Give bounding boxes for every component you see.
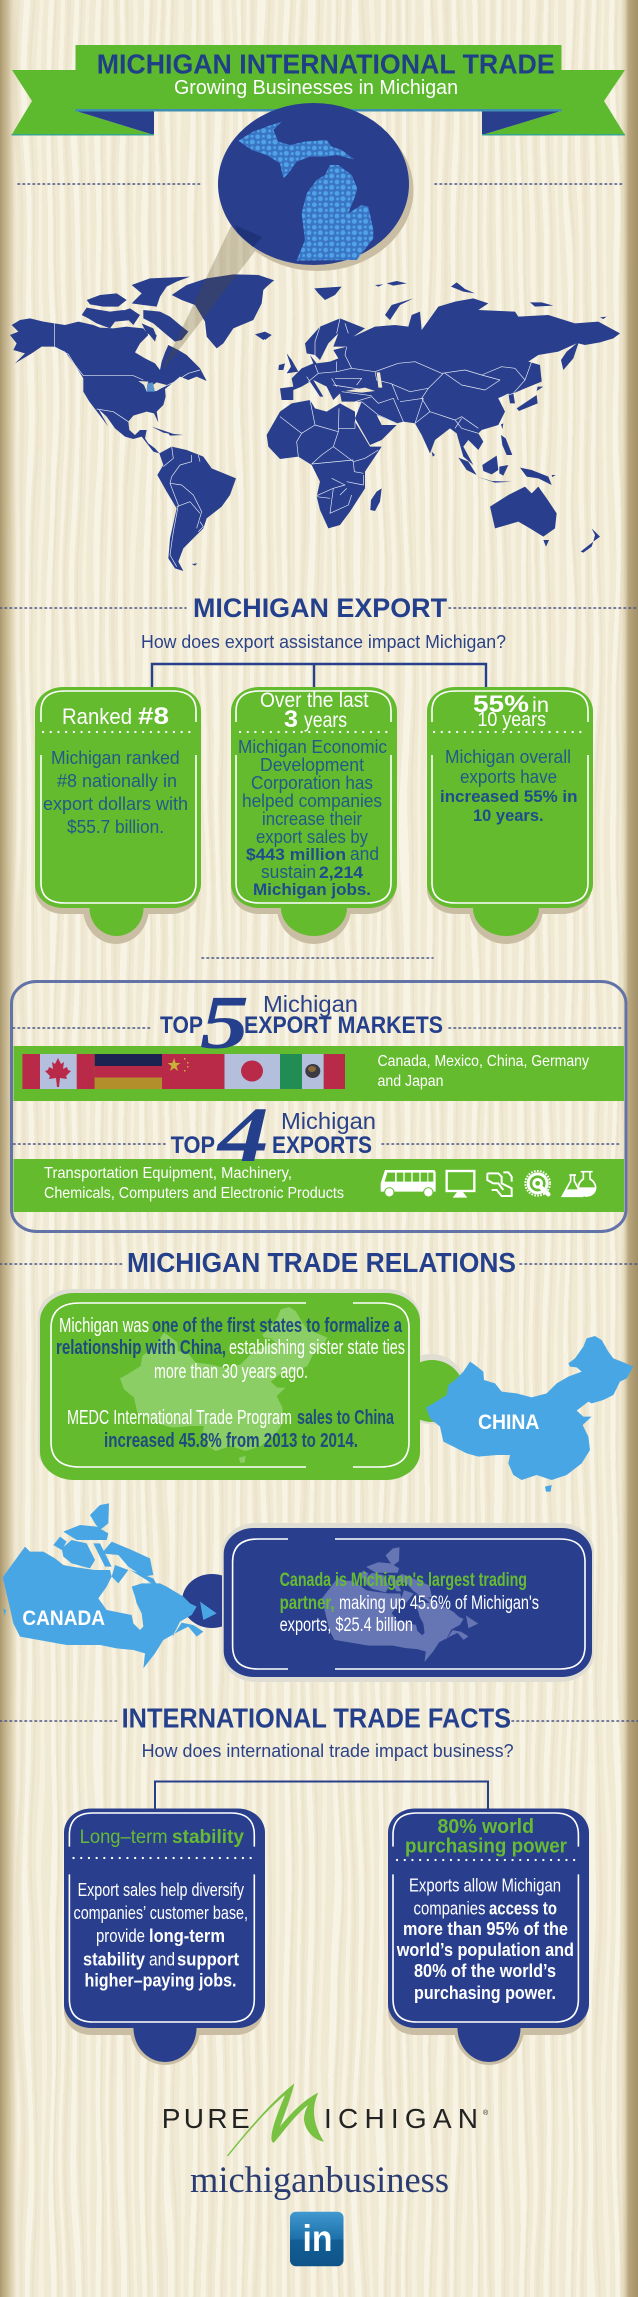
panel: Canada callout xyxy=(182,1523,594,1682)
heading: top 4 exports xyxy=(171,1091,376,1178)
card body: 80% of the world’s xyxy=(414,1961,556,1981)
heading: top 4 exports: EXPORTS xyxy=(272,1132,372,1159)
card body: increased 55% in xyxy=(440,787,578,806)
card heading: 80% world xyxy=(438,1816,534,1838)
panel: top exports box xyxy=(12,981,626,1232)
heading: top 4 exports: 4 xyxy=(215,1091,269,1178)
card body xyxy=(74,1880,248,1990)
card body: #8 nationally in xyxy=(57,771,177,791)
card body xyxy=(238,737,387,899)
card body: Corporation has xyxy=(251,773,373,793)
card body: $55.7 billion. xyxy=(67,817,164,837)
heading: top 4 exports: TOP xyxy=(171,1132,215,1159)
logo: Pure Michigan: PURE xyxy=(162,2103,250,2134)
card body: access to xyxy=(489,1898,557,1918)
card body: increase their xyxy=(262,809,362,829)
card heading xyxy=(62,703,169,730)
wordmark: michiganbusiness: michiganbusiness xyxy=(190,2160,449,2201)
flags: Canada, Germany, China, Japan, Mexico xyxy=(22,1054,345,1089)
text: top exports: Chemicals, Computers and Electronic Products xyxy=(44,1185,344,1202)
world map xyxy=(10,274,620,571)
heading: International Trade Facts: INTERNATIONAL TRADE FACTS xyxy=(122,1702,511,1734)
card heading: 3 xyxy=(284,706,298,733)
band: exports xyxy=(14,1159,624,1212)
card heading: #8 xyxy=(138,703,169,730)
card body: Michigan jobs. xyxy=(253,880,371,899)
heading: top 4 exports: Michigan xyxy=(281,1108,376,1134)
subtitle: Growing Businesses in Michigan xyxy=(174,77,458,99)
callout text xyxy=(56,1315,405,1452)
logo: Pure Michigan xyxy=(162,2083,489,2156)
card: 55% in 10 years xyxy=(427,687,593,944)
callout text: relationship with China, xyxy=(56,1337,226,1359)
callout text: Michigan was xyxy=(59,1315,149,1337)
subheading: trade question: How does international trade impact business? xyxy=(142,1741,514,1761)
card body: stability xyxy=(83,1949,145,1969)
card heading: in xyxy=(532,694,549,717)
card body: 2,214 xyxy=(319,863,364,882)
band: export markets xyxy=(14,1046,624,1101)
label: Canada: CANADA xyxy=(22,1607,105,1630)
globe with Michigan map xyxy=(218,103,414,271)
card body xyxy=(440,747,578,825)
card: ranked #8 xyxy=(35,687,201,944)
card body: world’s population and xyxy=(396,1940,574,1960)
card heading xyxy=(405,1816,567,1857)
card heading: stability xyxy=(172,1827,244,1848)
heading: top 5 export markets: 5 xyxy=(200,981,249,1065)
card body: Export sales help diversify xyxy=(78,1880,244,1900)
card heading xyxy=(260,689,369,733)
card body: and xyxy=(350,844,379,864)
subheading: export question: How does export assistance impact Michigan? xyxy=(141,632,506,652)
card body xyxy=(396,1876,574,2003)
text: top exports xyxy=(44,1165,344,1202)
card heading: Over the last xyxy=(260,689,369,712)
card: 80% world purchasing power xyxy=(388,1808,589,2065)
icon: LinkedIn xyxy=(290,2212,344,2266)
card body: helped companies xyxy=(242,791,382,811)
text: top markets xyxy=(378,1053,589,1090)
heading: Michigan Trade Relations: MICHIGAN TRADE RELATIONS xyxy=(127,1247,516,1278)
card body: Development xyxy=(260,755,364,775)
card body: export sales by xyxy=(256,827,368,847)
card: over the last 3 years xyxy=(231,687,397,944)
callout text: exports, $25.4 billion xyxy=(280,1615,413,1636)
card: long-term stability xyxy=(64,1808,265,2065)
card body: export dollars with xyxy=(43,794,188,814)
heading: top 5 export markets: Michigan xyxy=(263,991,358,1017)
card heading: 10 years xyxy=(478,709,546,731)
card heading: Long–term xyxy=(80,1827,168,1848)
icon: gear xyxy=(525,1171,550,1196)
card body: sustain xyxy=(261,862,316,882)
card body: $443 million xyxy=(246,845,346,864)
card body: support xyxy=(177,1949,239,1969)
card heading: Ranked xyxy=(62,704,132,729)
card body: 10 years. xyxy=(473,806,544,825)
card body: Michigan overall xyxy=(445,747,571,767)
card body: exports have xyxy=(460,767,557,787)
card heading xyxy=(80,1827,244,1848)
callout text: sales to China xyxy=(297,1407,395,1429)
card body: more than 95% of the xyxy=(403,1919,568,1939)
callout text: increased 45.8% from 2013 to 2014. xyxy=(104,1430,358,1452)
card body: Michigan ranked xyxy=(51,748,180,768)
card body: companies xyxy=(414,1898,486,1918)
callout text: more than 30 years ago. xyxy=(154,1361,308,1383)
card body: purchasing power. xyxy=(414,1983,556,2003)
callout text: making up 45.6% of Michigan's xyxy=(339,1593,539,1614)
icon: LinkedIn: in xyxy=(302,2218,332,2259)
card heading xyxy=(473,691,549,731)
callout text: one of the first states to formalize a xyxy=(152,1315,403,1337)
Americas xyxy=(10,274,273,571)
callout text: Canada is Michigan's largest trading xyxy=(280,1570,527,1591)
callout text: establishing sister state ties xyxy=(229,1337,405,1359)
text: top exports: Transportation Equipment, Machinery, xyxy=(44,1165,292,1182)
map: China xyxy=(426,1336,633,1492)
card heading: purchasing power xyxy=(405,1835,567,1857)
logo: Pure Michigan: ® xyxy=(483,2109,489,2117)
icon: flasks xyxy=(562,1172,596,1196)
card body: and xyxy=(149,1949,175,1969)
heading: top 5 export markets xyxy=(160,981,443,1065)
card body: Exports allow Michigan xyxy=(409,1876,561,1896)
heading: top 5 export markets: EXPORT MARKETS xyxy=(244,1012,443,1039)
title text: MICHIGAN INTERNATIONAL TRADE xyxy=(97,48,555,80)
card body xyxy=(43,748,188,837)
icon: circuit board xyxy=(487,1172,512,1196)
text: top markets: and Japan xyxy=(378,1073,444,1090)
logo: Pure Michigan: ICHIGAN xyxy=(324,2103,478,2134)
callout text xyxy=(280,1570,539,1636)
label: China: CHINA xyxy=(478,1411,539,1434)
card body: provide xyxy=(96,1926,145,1946)
card heading: 55% xyxy=(473,691,529,718)
map: Canada xyxy=(3,1503,217,1668)
connector lines to fact cards xyxy=(155,1782,488,1808)
title ribbon xyxy=(12,45,625,136)
Europe, Africa, Asia, Oceania xyxy=(265,280,620,553)
callout text: MEDC International Trade Program xyxy=(67,1407,292,1429)
text: top markets: Canada, Mexico, China, Germany xyxy=(378,1053,589,1070)
card body: Michigan Economic xyxy=(238,737,387,757)
card body: companies’ customer base, xyxy=(74,1903,248,1923)
card heading: years xyxy=(304,709,347,732)
magnifier beam xyxy=(163,226,266,368)
callout text: partner, xyxy=(280,1593,335,1614)
heading: Michigan Export: MICHIGAN EXPORT xyxy=(193,593,447,623)
icon: monitor xyxy=(447,1171,474,1198)
dotted rule beside the globe xyxy=(18,183,625,185)
heading: top 5 export markets: TOP xyxy=(160,1012,203,1039)
connector lines to export cards xyxy=(152,664,486,687)
icon: bus xyxy=(381,1170,436,1197)
card body: long-term xyxy=(149,1926,225,1946)
card body: higher–paying jobs. xyxy=(84,1970,236,1990)
panel: China callout xyxy=(38,1289,466,1480)
